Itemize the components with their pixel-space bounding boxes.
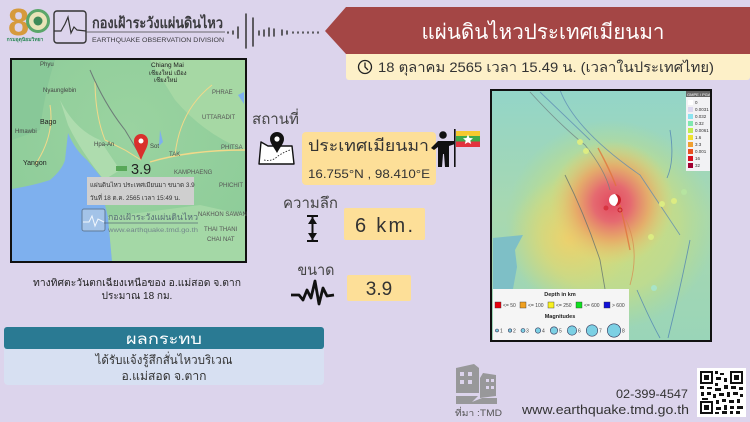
depth and magnitude legend: <= 100 [528,303,544,309]
map labels: THAI THANI [204,227,238,233]
PGA colour legend: 0.001 [695,149,707,154]
icon: sound wave decoration [228,14,318,48]
location box: 16.755°N , 98.410°E [308,167,430,181]
map labels: Sot [150,144,159,150]
map labels: TAK [169,152,180,158]
map labels: Chiang Mai [151,62,184,69]
icon: red map pin [134,134,148,160]
impact text: อ.แม่สอด จ.ตาก [122,369,206,383]
map caption: วันที่ 18 ต.ค. 2565 เวลา 15:49 น. [90,193,180,202]
location description [33,277,241,302]
icon: depth arrow [307,215,318,242]
source label: ที่มา :TMD [455,406,503,418]
watermark [82,209,198,234]
PGA colour legend: 0.32 [695,121,704,126]
location description: ทางทิศตะวันตกเฉียงเหนือของ อ.แม่สอด จ.ตาก [33,277,241,289]
logo: 80 years department emblem: 8 [8,2,29,44]
logo: earthquake observation division: กองเฝ้าระวังแผ่นดินไหว [92,13,223,32]
roads and border [35,70,245,165]
sea [12,133,112,261]
PGA colour legend: 1.6 [695,135,702,140]
map labels: Phyu [40,62,54,68]
map labels: เชียงใหม่ [154,76,177,84]
map labels: NAKHON SAWAN [198,212,247,218]
map labels: PHICHIT [219,183,243,189]
depth and magnitude legend: 2 [513,328,516,334]
icon: person holding Myanmar flag [431,129,480,167]
title ribbon [325,7,750,54]
location map panel [11,59,247,262]
map labels: PHRAE [212,90,233,96]
impact text [95,351,232,383]
impact text: ได้รับแจ้งรู้สึกสั่นไหวบริเวณ [95,351,232,368]
icon: map with pin [259,132,294,164]
depth heading: ความลึก [283,195,338,212]
PGA colour legend: 3.3 [695,142,702,147]
location description: ประมาณ 18 กม. [102,291,172,302]
logo: earthquake observation division [54,11,225,44]
magnitude value [347,275,411,301]
depth value: 6 km. [355,215,413,237]
watermark: กองเฝ้าระวังแผ่นดินไหว [108,212,198,222]
impact panel [4,327,324,385]
depth and magnitude legend: <= 50 [503,303,516,309]
impact heading: ผลกระทบ [126,331,202,348]
shakemap panel [491,90,711,341]
depth and magnitude legend [493,289,629,340]
map caption [87,177,195,205]
fault lines [530,90,690,338]
depth and magnitude legend: 6 [578,328,581,334]
depth and magnitude legend: 5 [559,328,562,334]
sea [493,235,523,289]
PGA colour legend: GMPE / PGA [687,92,711,97]
map labels: Hmawbi [15,129,37,135]
depth and magnitude legend: 1 [500,328,503,334]
map labels: Bago [40,119,56,126]
depth and magnitude legend: 4 [542,328,545,334]
epicentre beachball [604,194,622,212]
title ribbon: แผ่นดินไหวประเทศเมียนมา [422,20,664,44]
magnitude label: 3.9 [131,162,151,178]
PGA colour legend: 0 [695,100,698,105]
icon: seismic wave [291,281,334,304]
map labels: เชียงใหม่ เมือง [149,69,187,77]
map labels [15,62,247,243]
logo: 80 years department emblem [7,2,48,44]
contact website: www.earthquake.tmd.go.th [521,402,689,417]
PGA colour legend [686,91,711,171]
icon: damaged buildings [456,364,497,404]
map labels: Hpa-An [94,142,114,148]
icon: clock [358,60,372,74]
map labels: Yangon [23,160,47,167]
QR code [697,368,746,417]
magnitude value: 3.9 [366,279,392,300]
depth and magnitude legend: <= 250 [556,303,572,309]
depth and magnitude legend: > 600 [612,303,625,309]
PGA colour legend: 32 [695,163,701,168]
depth and magnitude legend: Depth in km [544,292,576,298]
contact phone: 02-399-4547 [616,387,688,401]
map labels: KAMPHAENG [174,170,213,176]
map labels: Nyaunglebin [43,88,76,94]
location heading: สถานที่ [252,108,299,128]
watermark: www.earthquake.tmd.go.th [107,227,198,234]
PGA colour legend: 0.032 [695,114,707,119]
depth and magnitude legend: Magnitudes [545,314,575,320]
PGA colour legend: 16 [695,156,701,161]
date bar: 18 ตุลาคม 2565 เวลา 15.49 น. (เวลาในประเทศไทย) [378,59,714,76]
depth and magnitude legend: 3 [526,328,529,334]
PGA colour legend: 0.0031 [695,107,709,112]
logo: earthquake observation division: EARTHQUAKE OBSERVATION DIVISION [92,37,224,44]
map labels: CHAI NAT [207,237,235,243]
location box [302,132,436,185]
date bar [346,54,750,80]
map labels: PHITSA [221,145,243,151]
location box: ประเทศเมียนมา [308,137,429,155]
depth and magnitude legend: <= 600 [584,303,600,309]
logo: 80 years department emblem: กรมอุตุนิยมวิทยา [7,36,44,43]
depth and magnitude legend: 8 [622,328,625,334]
map caption: แผ่นดินไหว ประเทศเมียนมา ขนาด 3.9 [90,181,195,189]
depth value [344,208,425,240]
magnitude heading: ขนาด [298,262,334,279]
PGA colour legend: 0.0061 [695,128,709,133]
station markers [577,139,687,291]
lighter northern land [150,60,245,150]
depth and magnitude legend: 7 [599,328,602,334]
map labels: UTTARADIT [202,115,236,121]
